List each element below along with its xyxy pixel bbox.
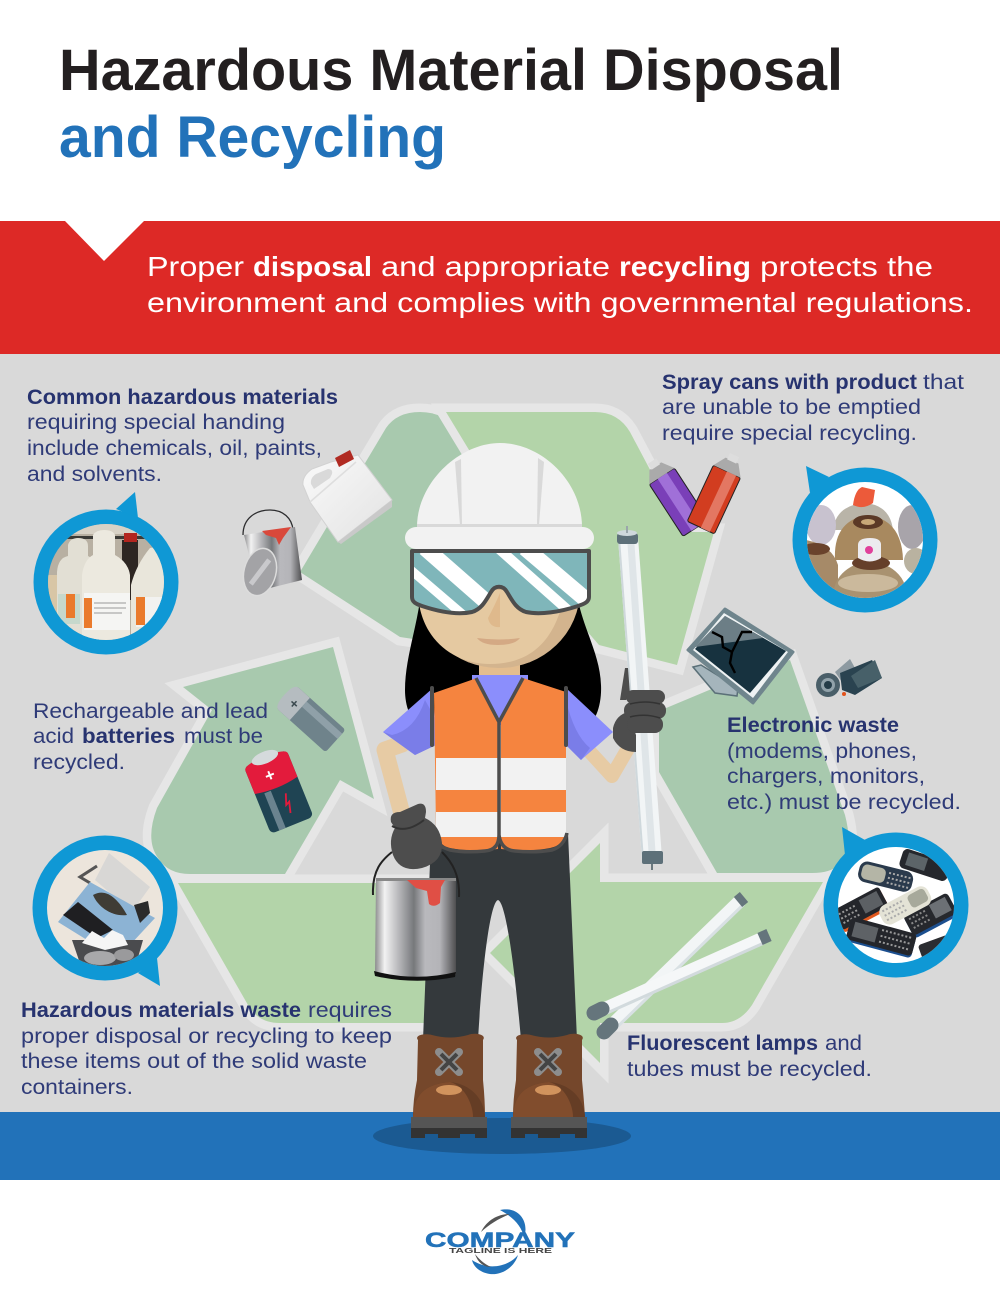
red banner: Proper xyxy=(147,251,244,282)
text: hazardous materials waste: requires xyxy=(308,999,392,1022)
hair xyxy=(405,600,601,725)
title: Hazardous Material Disposal xyxy=(59,38,843,103)
text: fluorescent lamps: tubes must be recycled. xyxy=(627,1058,872,1081)
text: fluorescent lamps: Fluorescent lamps xyxy=(627,1032,818,1055)
icon: camcorder xyxy=(816,659,882,697)
left boot xyxy=(411,1034,487,1138)
text: spray cans: require special recycling. xyxy=(662,422,917,445)
recycling symbol xyxy=(151,412,849,1063)
worker figure xyxy=(373,443,666,1138)
held fluorescent tube xyxy=(617,526,663,870)
icon: silver battery: + xyxy=(285,695,303,712)
floor shadow xyxy=(373,1118,631,1154)
text: common hazardous materials xyxy=(27,386,338,486)
bottom left arrow xyxy=(178,883,450,1023)
text: batteries: Rechargeable and lead xyxy=(33,700,268,723)
text: electronic waste: Electronic waste xyxy=(727,714,899,737)
title: and Recycling xyxy=(59,105,446,170)
top arrow xyxy=(300,412,714,665)
text: common hazardous materials: requiring special handing xyxy=(27,411,285,434)
red banner xyxy=(0,221,1000,354)
grey panel xyxy=(0,354,1000,1112)
company logo: COMPANY xyxy=(425,1229,575,1252)
trousers xyxy=(423,833,577,1040)
boots xyxy=(411,1034,587,1138)
red banner: protects the xyxy=(760,251,933,282)
red banner: and appropriate xyxy=(381,251,610,282)
photo bubble: spray cans xyxy=(792,466,938,612)
red banner: recycling xyxy=(619,251,751,282)
icon: red spray can xyxy=(687,449,748,534)
helmet xyxy=(405,443,594,549)
text: spray cans: that xyxy=(923,371,964,394)
text: batteries: recycled. xyxy=(33,751,125,774)
text: batteries: must be xyxy=(184,725,263,748)
bottom right arrow xyxy=(490,843,823,1063)
red banner: environment and complies with governmental regulations. xyxy=(147,287,973,318)
text: electronic waste: (modems, phones, xyxy=(727,740,917,763)
icon: paint can with lid xyxy=(239,510,302,599)
photo bubble: typewriter in waste bin xyxy=(32,836,178,986)
text: hazardous materials waste: proper disposal or recycling to keep xyxy=(21,1025,392,1048)
text: hazardous materials waste xyxy=(21,999,392,1099)
company logo: TAGLINE IS HERE xyxy=(449,1248,553,1255)
text: batteries: acid xyxy=(33,725,74,748)
text: spray cans: Spray cans with product xyxy=(662,371,917,394)
photo bubble: old mobile phones xyxy=(824,827,968,978)
face xyxy=(418,512,580,668)
neck xyxy=(479,650,520,695)
left glove xyxy=(391,804,442,869)
t-shirt xyxy=(383,675,613,760)
right boot xyxy=(511,1034,587,1138)
text: electronic waste: etc.) must be recycled. xyxy=(727,791,961,814)
icon: red battery xyxy=(241,743,314,834)
text: common hazardous materials: and solvents. xyxy=(27,463,162,486)
hi-vis vest xyxy=(432,678,567,852)
right glove xyxy=(613,668,666,752)
company logo xyxy=(425,1209,575,1274)
text: common hazardous materials: Common hazardous materials xyxy=(27,386,338,409)
text: spray cans: are unable to be emptied xyxy=(662,396,921,419)
text: fluorescent lamps: and xyxy=(825,1032,862,1055)
text: spray cans xyxy=(662,371,964,445)
icon: red battery: + xyxy=(262,765,278,786)
paint bucket xyxy=(373,852,459,981)
text: batteries: batteries xyxy=(82,725,175,748)
safety goggles xyxy=(410,549,591,616)
icon: silver battery xyxy=(274,684,346,752)
icon: purple spray can xyxy=(639,453,708,536)
text: electronic waste: chargers, monitors, xyxy=(727,765,925,788)
arms xyxy=(385,744,630,814)
icon: fluorescent tubes xyxy=(594,897,769,1034)
icon: plastic jug xyxy=(303,450,392,544)
left arrow xyxy=(151,647,374,874)
text: hazardous materials waste: containers. xyxy=(21,1076,133,1099)
text: hazardous materials waste: these items out of the solid waste xyxy=(21,1050,367,1073)
right arrow xyxy=(659,660,849,873)
text: common hazardous materials: include chemicals, oil, paints, xyxy=(27,437,322,460)
text: fluorescent lamps xyxy=(627,1032,872,1081)
text: electronic waste xyxy=(727,714,961,814)
blue floor band xyxy=(0,1112,1000,1180)
text: hazardous materials waste: Hazardous materials waste xyxy=(21,999,301,1022)
text: batteries xyxy=(33,700,268,774)
red banner: disposal xyxy=(253,251,372,282)
icon: cracked monitor xyxy=(688,609,793,703)
title xyxy=(59,38,843,170)
photo bubble: chemical bottles xyxy=(34,492,178,654)
